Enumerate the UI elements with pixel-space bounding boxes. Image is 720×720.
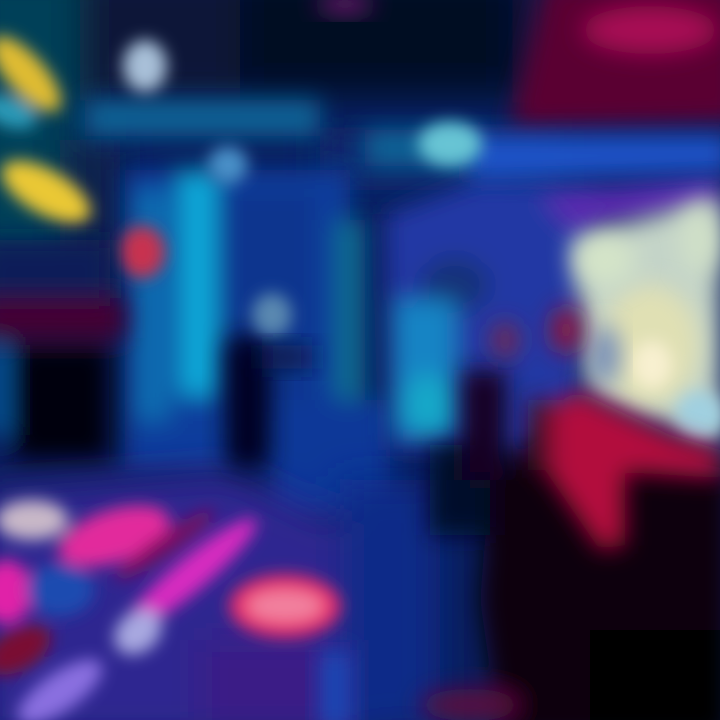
horizontal light beams bbox=[85, 100, 720, 180]
panel: bright screen bbox=[572, 195, 720, 445]
panel: purple floor bbox=[0, 470, 440, 720]
icon: red lamp bbox=[119, 226, 165, 278]
floor edge glow bbox=[320, 650, 350, 720]
icon: red figure bbox=[492, 306, 720, 550]
icon: neon floor lights bbox=[0, 493, 341, 720]
panel: right wall bbox=[385, 175, 720, 450]
icon: white lights bbox=[123, 40, 482, 184]
panel: top wall bbox=[0, 0, 560, 300]
icon: standing silhouette bbox=[225, 293, 312, 470]
panel: left doorway bbox=[0, 240, 125, 460]
icon: yellow neon signs bbox=[0, 26, 100, 236]
panel: central blue column bbox=[125, 170, 390, 520]
panel: top right crimson sign bbox=[317, 0, 720, 128]
panel: dark foreground crowd bbox=[420, 370, 720, 720]
